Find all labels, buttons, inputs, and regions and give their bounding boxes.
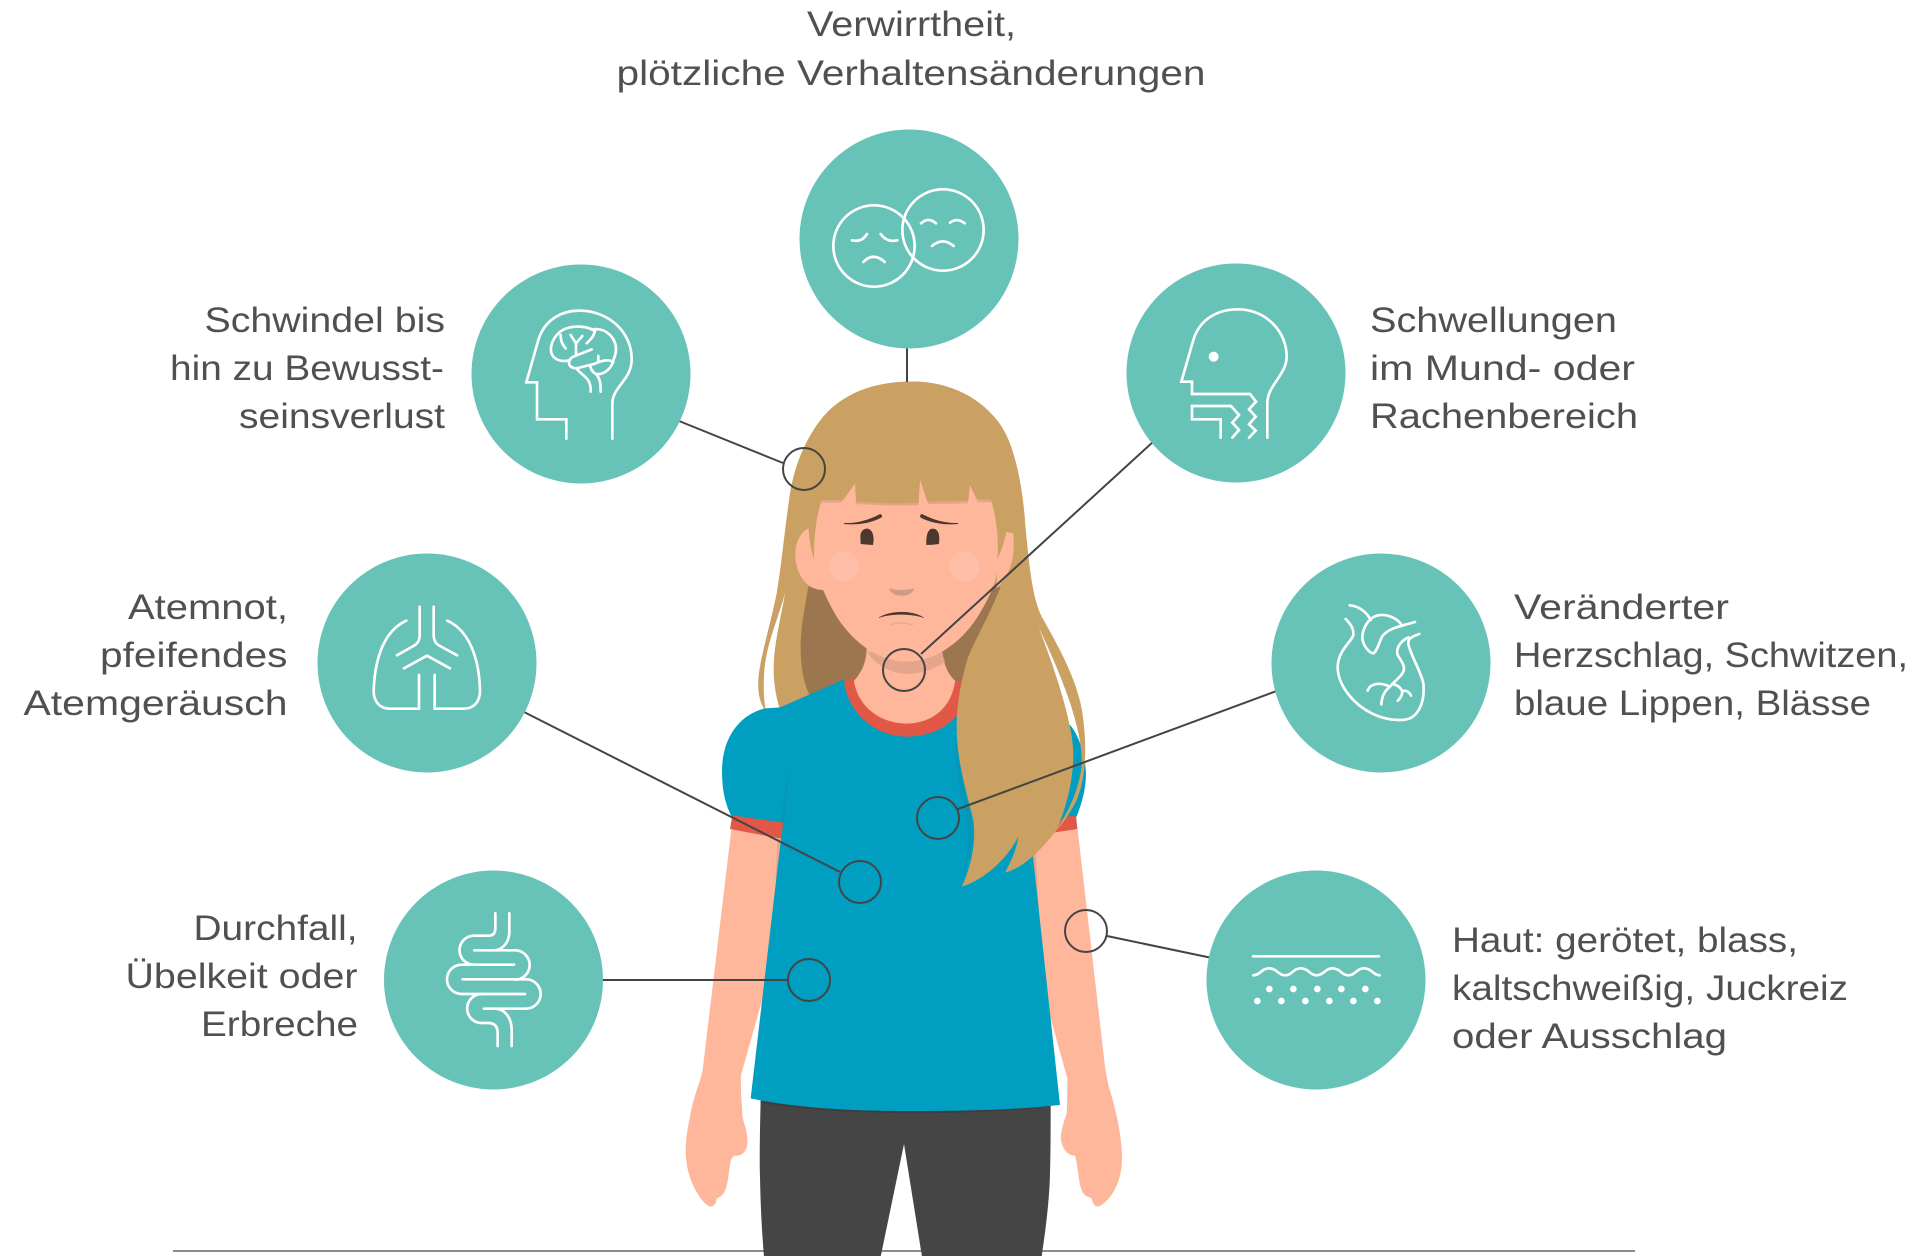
front hair bbox=[790, 382, 1025, 559]
icon: heart bbox=[1338, 605, 1424, 720]
text: dizziness: hin zu Bewusst- bbox=[170, 349, 444, 388]
icon: head and throat bbox=[1181, 309, 1287, 438]
blush bbox=[829, 552, 979, 582]
text: breathing: Atemgeräusch bbox=[24, 684, 288, 723]
panel: heart bbox=[1272, 554, 1490, 772]
text: breathing: pfeifendes bbox=[100, 636, 288, 675]
text: throat swelling: Rachenbereich bbox=[1370, 397, 1638, 436]
text: throat swelling: Schwellungen bbox=[1370, 301, 1617, 340]
icon: two sad faces bbox=[833, 189, 984, 287]
text: breathing: Atemnot, bbox=[128, 588, 288, 627]
text: heart: Veränderter bbox=[1514, 588, 1729, 627]
connector: skin bbox=[1065, 910, 1212, 958]
text: heart: Herzschlag, Schwitzen, bbox=[1514, 636, 1908, 675]
text: dizziness: Schwindel bis bbox=[204, 301, 445, 340]
connector: brain bbox=[679, 421, 825, 490]
ears bbox=[795, 528, 1014, 590]
text: dizziness: seinsverlust bbox=[239, 397, 445, 436]
neck shadow bbox=[867, 652, 945, 674]
arm shadow bbox=[776, 837, 1038, 910]
icon: intestines bbox=[447, 913, 541, 1046]
panel: throat swelling bbox=[1126, 264, 1346, 482]
text: throat swelling: im Mund- oder bbox=[1370, 349, 1635, 388]
lock shadow bbox=[955, 727, 972, 875]
panel: confusion bbox=[800, 130, 1018, 348]
eyebrows bbox=[844, 514, 958, 524]
chin mark bbox=[889, 623, 913, 625]
right sleeve band bbox=[1053, 815, 1077, 833]
connector: heart bbox=[917, 689, 1282, 839]
text: heart: blaue Lippen, Blässe bbox=[1514, 684, 1871, 723]
text: confusion: plötzliche Verhaltensänderungen bbox=[616, 54, 1206, 93]
text: skin: kaltschweißig, Juckreiz bbox=[1452, 969, 1848, 1008]
left sleeve band bbox=[730, 815, 783, 839]
face bbox=[814, 473, 999, 662]
mouth bbox=[879, 612, 924, 618]
connector: lungs bbox=[524, 712, 881, 903]
icon: lungs bbox=[374, 607, 480, 709]
panel: digestion bbox=[384, 870, 603, 1090]
ground line bbox=[173, 1250, 1635, 1252]
text: confusion: Verwirrtheit, bbox=[807, 5, 1016, 44]
text: digestion: Erbreche bbox=[201, 1005, 358, 1044]
panel: dizziness bbox=[472, 264, 690, 484]
text: skin: Haut: gerötet, blass, bbox=[1452, 921, 1798, 960]
figure: girl bbox=[686, 382, 1122, 1256]
panel: breathing bbox=[318, 554, 536, 772]
panel: skin bbox=[1206, 870, 1426, 1090]
pants shadow bbox=[761, 1102, 1051, 1113]
right arm bbox=[1033, 820, 1122, 1207]
dark under hair bbox=[801, 587, 1001, 697]
connector: intestines bbox=[602, 959, 830, 1001]
icon: head with brain bbox=[526, 311, 632, 439]
text: skin: oder Ausschlag bbox=[1452, 1017, 1727, 1056]
outer hair strand bbox=[1038, 617, 1085, 832]
text: digestion: Übelkeit oder bbox=[126, 957, 358, 996]
icon: skin layers bbox=[1253, 956, 1381, 1004]
sleeve crease bbox=[780, 762, 790, 824]
left arm bbox=[686, 827, 782, 1207]
eyes bbox=[860, 529, 939, 545]
back hair bbox=[758, 382, 1042, 713]
shirt bbox=[722, 679, 1086, 1111]
long hair lock bbox=[957, 540, 1073, 887]
collar bbox=[844, 678, 962, 737]
text: digestion: Durchfall, bbox=[194, 909, 358, 948]
hair gap bbox=[764, 593, 785, 710]
nose bbox=[889, 588, 914, 596]
neck bbox=[852, 647, 960, 727]
fringe shadow bbox=[819, 498, 992, 506]
pants bbox=[760, 1100, 1051, 1256]
connector: top bbox=[906, 346, 908, 382]
connector: throat bbox=[883, 441, 1154, 691]
